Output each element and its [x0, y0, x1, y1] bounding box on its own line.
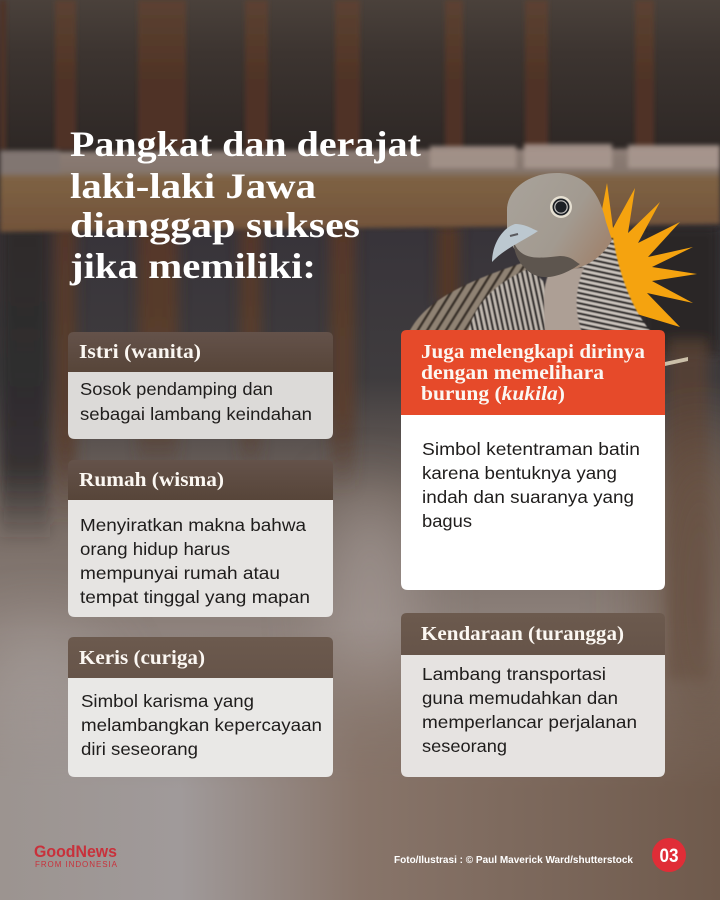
- panel: Keris (curiga): diri seseorang: [81, 739, 198, 759]
- panel: Kendaraan (turangga): seseorang: [422, 736, 507, 756]
- panel: burung (kukila): burung ( kukila): [421, 383, 565, 405]
- photo credit: Foto/Ilustrasi : © Paul Maverick Ward/shutterstock: [394, 854, 633, 866]
- panel: Rumah (wisma): orang hidup harus: [80, 539, 230, 559]
- panel: Istri (wanita): sebagai lambang keindahan: [80, 404, 312, 424]
- panel: Rumah (wisma): Menyiratkan makna bahwa: [80, 515, 306, 535]
- icon: orange starburst: [600, 183, 697, 327]
- panel: Rumah (wisma): tempat tinggal yang mapan: [80, 587, 310, 607]
- title: laki-laki Jawa: [70, 166, 316, 206]
- logo: GoodNews from Indonesia: [34, 842, 118, 869]
- bird photo illustration: [406, 173, 688, 366]
- panel: burung (kukila): [401, 330, 665, 590]
- panel: burung (kukila): Simbol ketentraman batin: [422, 439, 640, 459]
- title: dianggap sukses: [70, 205, 360, 245]
- panel: burung (kukila): dengan memelihara: [421, 362, 604, 384]
- panel: Kendaraan (turangga): guna memudahkan dan: [422, 688, 618, 708]
- page number badge: [652, 838, 686, 872]
- title: Pangkat dan derajat: [70, 124, 421, 164]
- panel: Keris (curiga): Keris (curiga): [79, 647, 205, 669]
- panel: burung (kukila): karena bentuknya yang: [422, 463, 617, 483]
- panel: Istri (wanita): Istri (wanita): [79, 341, 201, 363]
- panel: Kendaraan (turangga): memperlancar perjalanan: [422, 712, 637, 732]
- panel: Istri (wanita): [68, 332, 333, 439]
- panel: Rumah (wisma): mempunyai rumah atau: [80, 563, 280, 583]
- page number badge: 03: [660, 846, 678, 867]
- panel: burung (kukila): bagus: [422, 511, 472, 531]
- panel: Rumah (wisma): Rumah (wisma): [79, 469, 224, 491]
- panel: Kendaraan (turangga): [401, 613, 665, 777]
- title: jika memiliki:: [69, 246, 316, 286]
- panel: Keris (curiga): [68, 637, 333, 777]
- panel: Rumah (wisma): [68, 460, 333, 617]
- panel: burung (kukila): Juga melengkapi dirinya: [421, 341, 645, 363]
- panel: Istri (wanita): Sosok pendamping dan: [80, 379, 273, 399]
- panel: burung (kukila): indah dan suaranya yang: [422, 487, 634, 507]
- logo: GoodNews from Indonesia: FROM INDONESIA: [35, 860, 118, 869]
- panel: Keris (curiga): Simbol karisma yang: [81, 691, 254, 711]
- panel: Kendaraan (turangga): Lambang transportasi: [422, 664, 606, 684]
- panel: Keris (curiga): melambangkan kepercayaan: [81, 715, 322, 735]
- panel: Kendaraan (turangga): Kendaraan (turangga): [421, 623, 624, 645]
- logo: GoodNews from Indonesia: GoodNews: [34, 842, 117, 861]
- title: [69, 124, 421, 286]
